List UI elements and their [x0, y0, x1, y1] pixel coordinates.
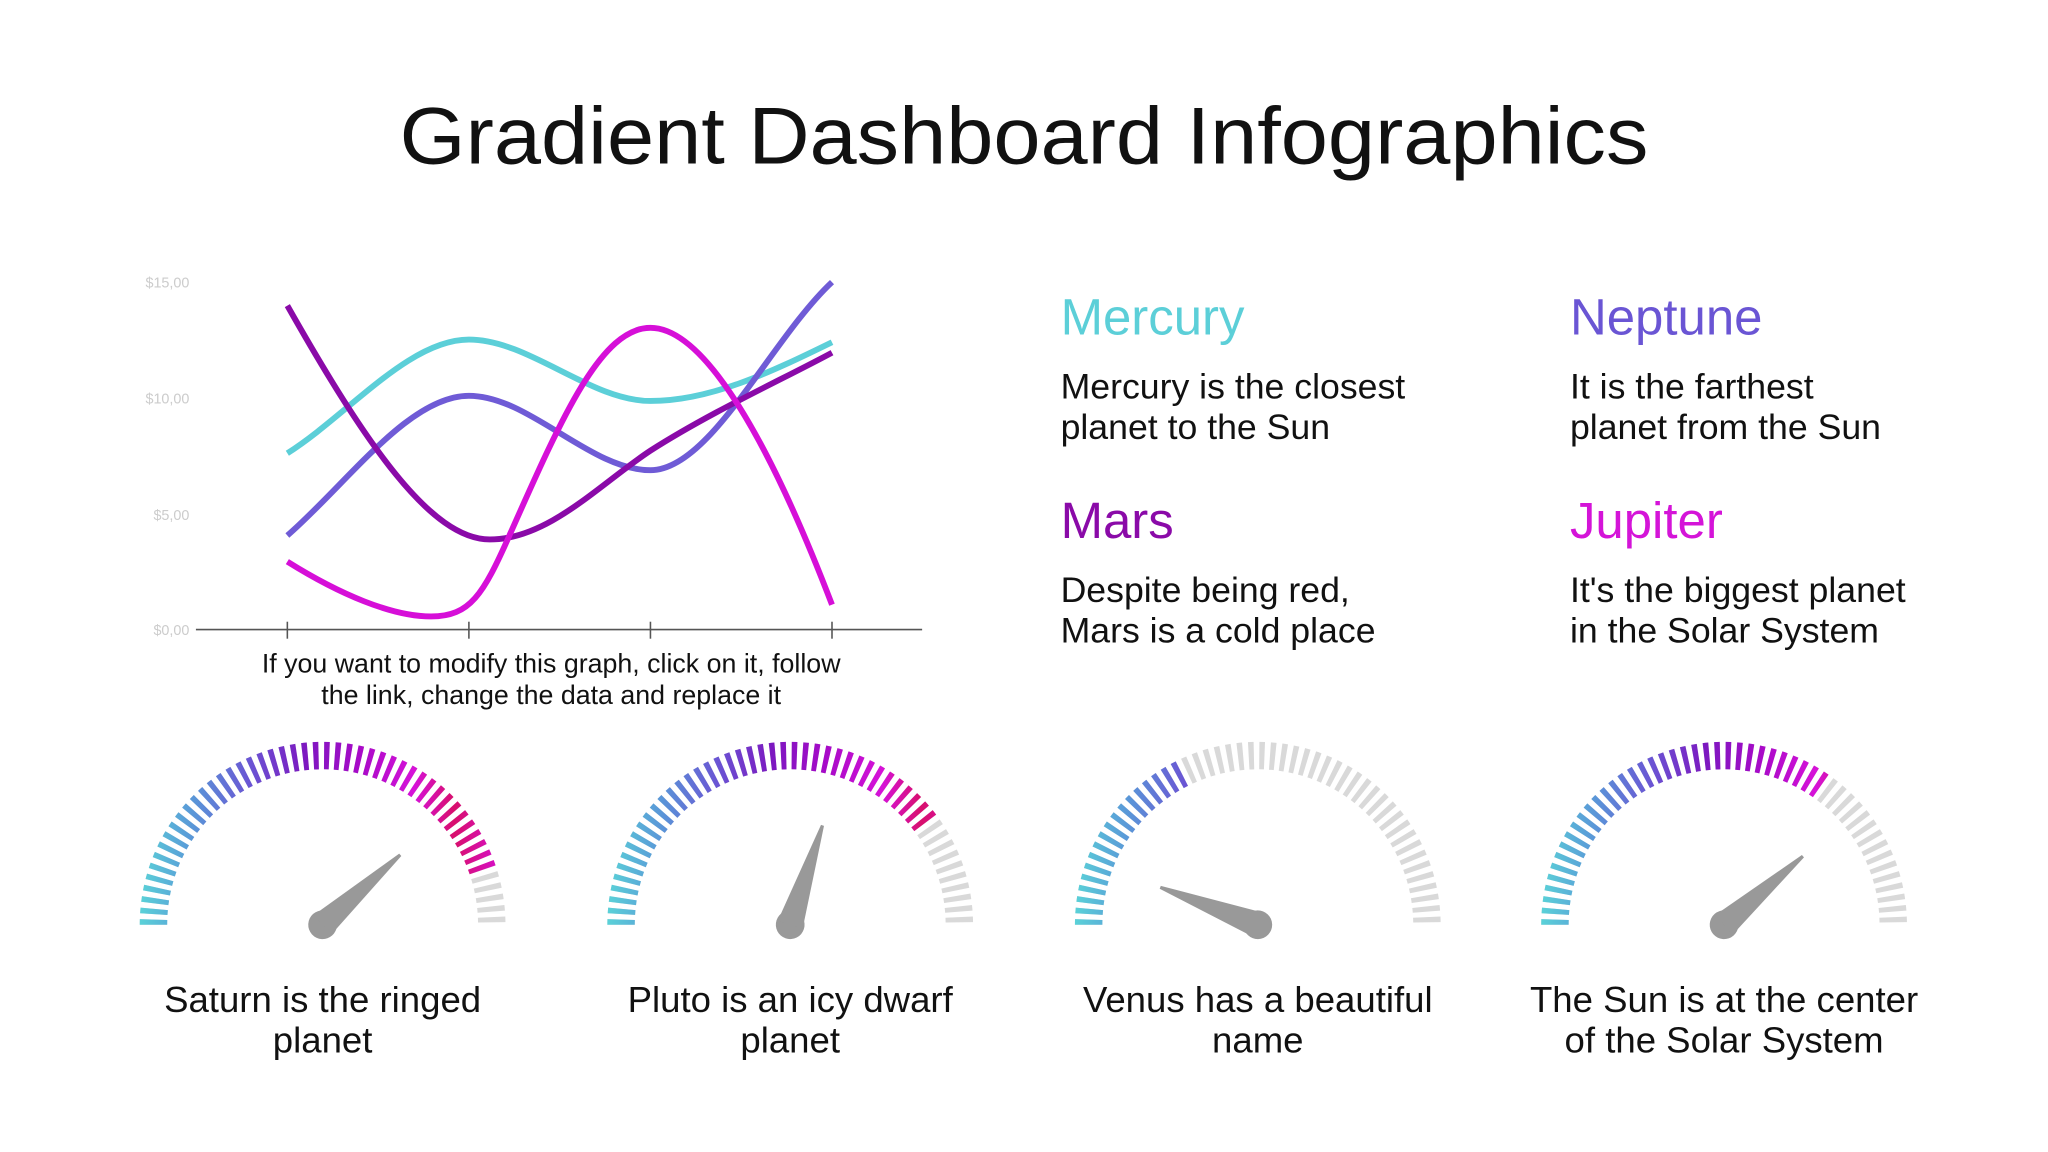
y axis labels: $10,00 [145, 392, 189, 408]
panel: Jupiter [1570, 492, 1906, 651]
caption: Sun: The Sun is at the center [1530, 979, 1918, 1020]
caption: Pluto: planet [740, 1020, 840, 1061]
gauge: Saturn [153, 756, 492, 945]
caption: Saturn: planet [273, 1020, 372, 1061]
panel: Mercury: Mercury [1061, 288, 1245, 345]
panel: Neptune: Neptune [1570, 288, 1762, 345]
needle [1155, 874, 1276, 943]
panel: Neptune: planet from the Sun [1570, 407, 1881, 447]
caption: Sun: of the Solar System [1565, 1020, 1884, 1061]
y axis labels: $0,00 [153, 623, 189, 639]
caption: Pluto: Pluto is an icy dwarf [628, 979, 954, 1020]
panel: Jupiter: Jupiter [1570, 492, 1723, 549]
gauge: Pluto [621, 756, 959, 943]
panel: Mars: Mars [1061, 492, 1174, 549]
y axis labels: $5,00 [153, 508, 189, 524]
needle [302, 844, 410, 945]
title: Gradient Dashboard Infographics [400, 91, 1648, 181]
needle [772, 821, 836, 943]
panel: Mercury: planet to the Sun [1061, 407, 1330, 447]
panel: Mars [1061, 492, 1376, 651]
panel: Mars: Despite being red, [1061, 570, 1350, 610]
caption: Saturn: Saturn is the ringed [164, 979, 481, 1020]
panel: Mercury: Mercury is the closest [1061, 366, 1405, 406]
gauge: Sun [1555, 756, 1893, 945]
caption: Venus: name [1212, 1020, 1304, 1061]
panel: Jupiter: It's the biggest planet [1570, 570, 1906, 610]
panel: Jupiter: in the Solar System [1570, 611, 1879, 651]
line chart [145, 275, 922, 639]
gauge: Venus [1089, 756, 1427, 943]
panel: Neptune [1570, 288, 1881, 447]
caption: Venus: Venus has a beautiful [1083, 979, 1433, 1020]
y axis labels [145, 275, 189, 639]
chart caption: the link, change the data and replace it [321, 680, 782, 710]
panel: Neptune: It is the farthest [1570, 366, 1814, 406]
chart caption: If you want to modify this graph, click on it, follow [262, 649, 841, 679]
needle [1704, 845, 1812, 945]
panel: Mars: Mars is a cold place [1061, 611, 1376, 651]
panel: Mercury [1061, 288, 1405, 447]
y axis labels: $15,00 [145, 275, 189, 291]
